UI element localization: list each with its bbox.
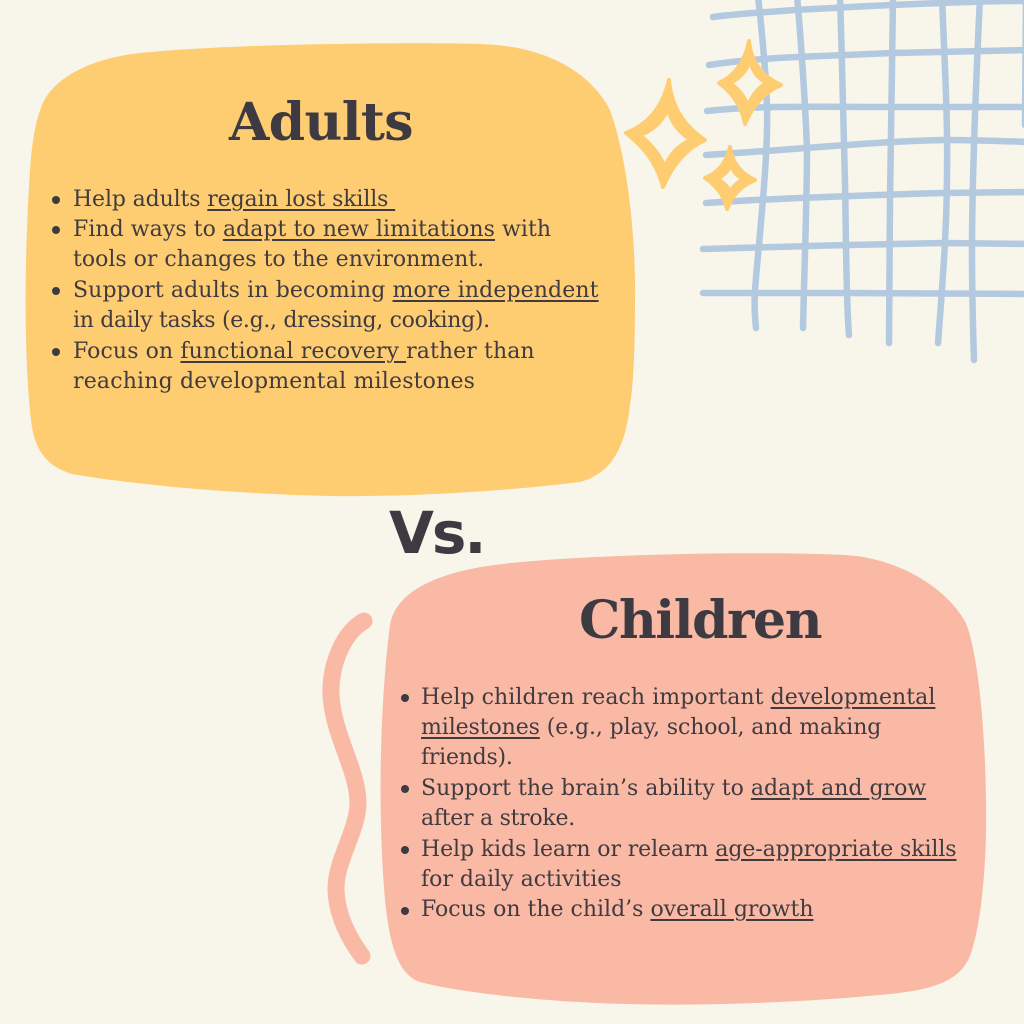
- text block: children list: for daily activities: [421, 867, 622, 892]
- text block: adults list: Support adults in becoming more independent: [73, 278, 599, 303]
- text block: adults list: in daily tasks (e.g., dressing, cooking).: [73, 308, 490, 333]
- text block: adults list: Help adults regain lost skills: [73, 186, 388, 212]
- heading: Vs.: Vs.: [389, 499, 484, 567]
- decorative wavy line: [331, 621, 364, 956]
- text block: adults list: tools or changes to the environment.: [73, 247, 484, 272]
- icon: blue grid: [703, 0, 1024, 360]
- text block: children list: Focus on the child’s overall growth: [421, 897, 814, 922]
- text block: children list: Help kids learn or relearn age-appropriate skills: [421, 836, 956, 862]
- text block: adults list: reaching developmental milestones: [73, 369, 475, 394]
- text block: children list: [401, 684, 956, 922]
- text block: children list: Support the brain’s ability to adapt and grow: [421, 776, 926, 801]
- heading: Adults: Adults: [229, 92, 413, 153]
- text block: children list: after a stroke.: [421, 806, 575, 831]
- text block: children list: Help children reach important developmental: [421, 684, 935, 710]
- text block: adults list: [52, 186, 599, 394]
- text block: adults list: Focus on functional recovery rather than: [73, 338, 535, 364]
- text block: children list: milestones (e.g., play, school, and making: [421, 715, 881, 740]
- icon: sparkles: [626, 41, 781, 209]
- text block: children list: friends).: [421, 745, 513, 770]
- panel: children blob: [381, 553, 986, 1005]
- text block: adults list: Find ways to adapt to new limitations with: [73, 217, 551, 242]
- panel: adults blob: [26, 43, 635, 496]
- heading: Children: Children: [579, 590, 821, 651]
